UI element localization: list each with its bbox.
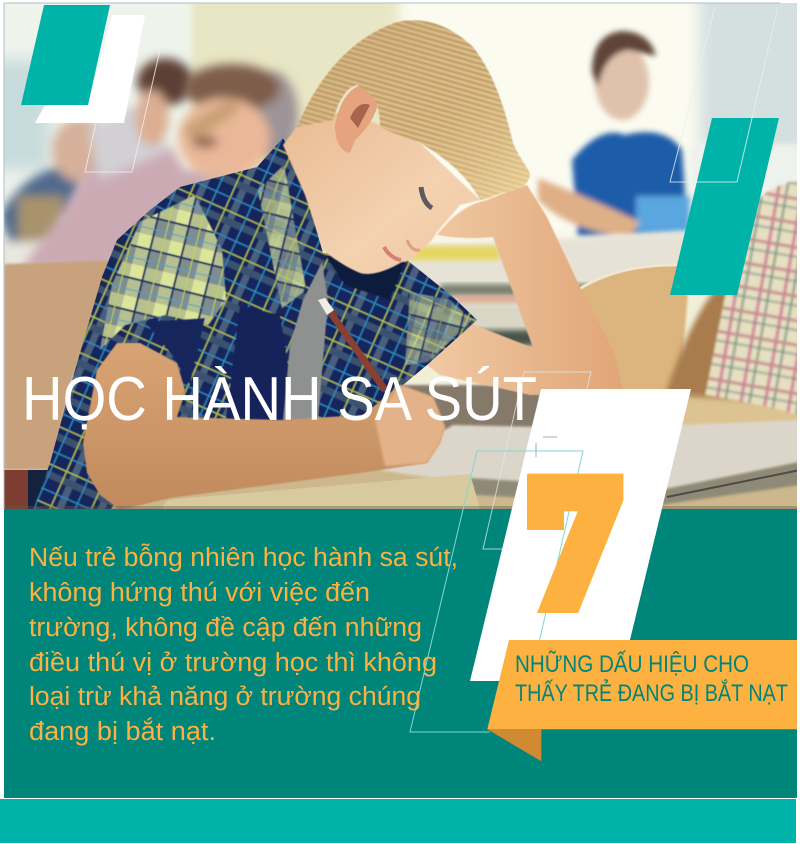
photo bottom shadow	[4, 506, 797, 509]
light plaid on sleeve	[100, 195, 226, 350]
ribbon text: NHỮNG DẤU HIỆU CHO	[515, 650, 749, 678]
teal parallelogram	[21, 5, 110, 105]
outline parallelogram	[670, 7, 778, 182]
body paragraph	[29, 543, 458, 746]
classroom photo	[0, 0, 800, 520]
boy's eye, nose and mouth	[384, 187, 432, 260]
boy's raised arm	[427, 185, 624, 395]
body paragraph: điều thú vị ở trường học thì không	[29, 649, 437, 677]
body paragraph: không hứng thú với việc đến	[29, 579, 370, 607]
outline parallelogram	[85, 50, 160, 172]
blurred girl head	[178, 64, 298, 178]
title: HỌC HÀNH SA SÚT	[22, 365, 537, 434]
dark neck shadow	[325, 255, 405, 300]
blurred classroom background	[0, 0, 800, 510]
girl in plaid shirt at right edge	[665, 180, 800, 415]
teal text panel	[4, 509, 797, 798]
light plaid on collar	[258, 165, 306, 308]
blurred child in navy sweater	[4, 123, 101, 262]
hair texture	[297, 20, 530, 200]
top-right teal decoration	[670, 7, 779, 295]
dark plaid base	[30, 130, 490, 520]
left drop of the numeral	[527, 474, 564, 530]
outline frame behind white panel	[483, 372, 591, 549]
body paragraph: trường, không đề cập đến những	[29, 614, 422, 642]
teal parallelogram	[670, 118, 779, 295]
boy's hair	[297, 20, 530, 200]
dark chest placket	[225, 306, 288, 420]
blurred boy in blue shirt	[538, 31, 690, 236]
paper and laptop on desk	[163, 385, 800, 509]
grey undershirt	[283, 262, 328, 420]
small grey marks	[536, 437, 557, 457]
white parallelogram	[35, 15, 145, 123]
desks and chairs	[4, 232, 800, 510]
navy sleeve hem	[145, 318, 205, 385]
boy's neck and face	[283, 110, 480, 274]
body paragraph: Nếu trẻ bỗng nhiên học hành sa sút,	[29, 543, 458, 572]
teal outline frame	[410, 451, 583, 732]
ribbon body	[487, 640, 797, 729]
top-left white and teal decoration	[21, 5, 160, 172]
boy's ear	[335, 85, 378, 153]
number 7: 7	[524, 448, 629, 647]
hair highlight	[297, 20, 530, 200]
body paragraph: đang bị bắt nạt.	[29, 717, 216, 746]
photo top and left edge lines	[4, 3, 780, 509]
bottom teal bar	[0, 799, 796, 843]
ribbon banner	[487, 640, 797, 761]
body paragraph: loại trừ khả năng ở trường chúng	[29, 683, 421, 711]
pencil	[318, 298, 388, 392]
blurred child in striped sweater	[22, 58, 245, 270]
ribbon text	[515, 650, 788, 707]
boy's shirt	[30, 130, 490, 520]
light plaid on far sleeve	[405, 292, 472, 365]
white parallelogram behind number	[470, 389, 691, 681]
boy's writing arm and hand	[83, 343, 445, 510]
ribbon fold	[487, 729, 541, 761]
